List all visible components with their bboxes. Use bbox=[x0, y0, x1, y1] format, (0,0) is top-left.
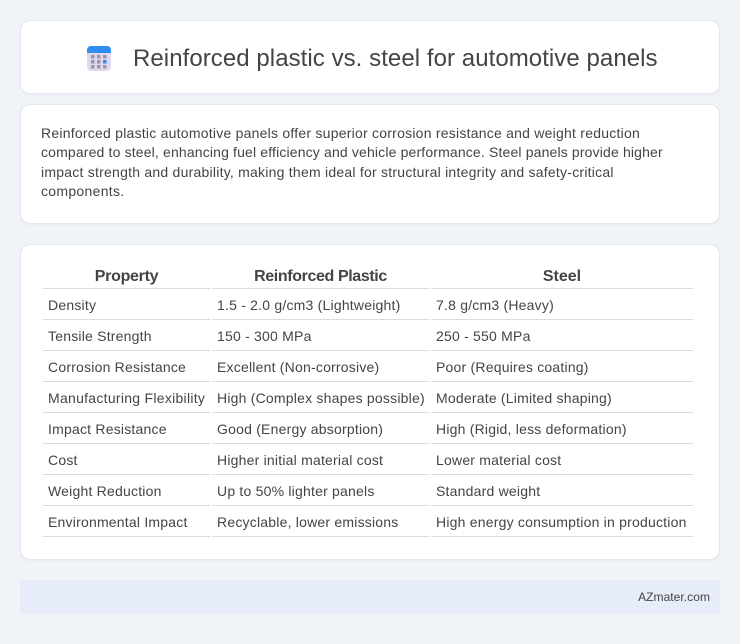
row: environmental impact: Recyclable, lower emissions bbox=[217, 514, 399, 530]
row: density: Density bbox=[48, 297, 96, 313]
icon: calendar bbox=[87, 46, 111, 71]
row: density bbox=[48, 297, 554, 313]
row: impact resistance: Impact Resistance bbox=[48, 421, 167, 437]
row: cost: Cost bbox=[48, 452, 78, 468]
table header bbox=[95, 268, 581, 285]
summary text: Reinforced plastic automotive panels offer superior corrosion resistance and weight reduction bbox=[41, 125, 640, 141]
table header: Reinforced Plastic bbox=[254, 268, 387, 285]
panel: comparison table bbox=[20, 244, 720, 560]
footer credit: AZmater.com bbox=[638, 590, 710, 604]
row: weight reduction bbox=[48, 483, 540, 499]
row: tensile strength bbox=[48, 328, 531, 344]
row: impact resistance: High (Rigid, less deformation) bbox=[436, 421, 627, 437]
row: cost bbox=[48, 452, 562, 468]
row: tensile strength: Tensile Strength bbox=[48, 328, 152, 344]
row: corrosion resistance bbox=[48, 359, 589, 375]
row: tensile strength: 150 - 300 MPa bbox=[217, 328, 312, 344]
row: manufacturing flexibility bbox=[48, 390, 612, 406]
row: impact resistance bbox=[48, 421, 627, 437]
table header: Property bbox=[95, 268, 158, 285]
row: weight reduction: Weight Reduction bbox=[48, 483, 162, 499]
footer bar bbox=[20, 580, 720, 614]
panel: title card bbox=[20, 20, 720, 94]
row: weight reduction: Standard weight bbox=[436, 483, 540, 499]
row: corrosion resistance: Poor (Requires coating) bbox=[436, 359, 589, 375]
row: tensile strength: 250 - 550 MPa bbox=[436, 328, 531, 344]
row: environmental impact bbox=[48, 514, 687, 530]
row: corrosion resistance: Corrosion Resistance bbox=[48, 359, 186, 375]
row: manufacturing flexibility: Moderate (Limited shaping) bbox=[436, 390, 612, 406]
row: cost: Higher initial material cost bbox=[217, 452, 383, 468]
row: density: 1.5 - 2.0 g/cm3 (Lightweight) bbox=[217, 297, 401, 313]
row: environmental impact: Environmental Impact bbox=[48, 514, 188, 530]
title: Reinforced plastic vs. steel for automotive panels bbox=[133, 45, 658, 72]
summary text: compared to steel, enhancing fuel efficiency and vehicle performance. Steel panels provide higher bbox=[41, 144, 663, 160]
row: manufacturing flexibility: High (Complex shapes possible) bbox=[217, 390, 425, 406]
row: impact resistance: Good (Energy absorption) bbox=[217, 421, 383, 437]
row: environmental impact: High energy consumption in production bbox=[436, 514, 687, 530]
summary text bbox=[41, 125, 663, 199]
row: corrosion resistance: Excellent (Non-corrosive) bbox=[217, 359, 379, 375]
row: density: 7.8 g/cm3 (Heavy) bbox=[436, 297, 554, 313]
row: cost: Lower material cost bbox=[436, 452, 561, 468]
table header: Steel bbox=[543, 268, 581, 285]
summary text: impact strength and durability, making them ideal for structural integrity and safety-critical bbox=[41, 164, 614, 180]
panel: summary card bbox=[20, 104, 720, 224]
row: manufacturing flexibility: Manufacturing Flexibility bbox=[48, 390, 205, 406]
summary text: components. bbox=[41, 183, 124, 199]
row: weight reduction: Up to 50% lighter panels bbox=[217, 483, 375, 499]
